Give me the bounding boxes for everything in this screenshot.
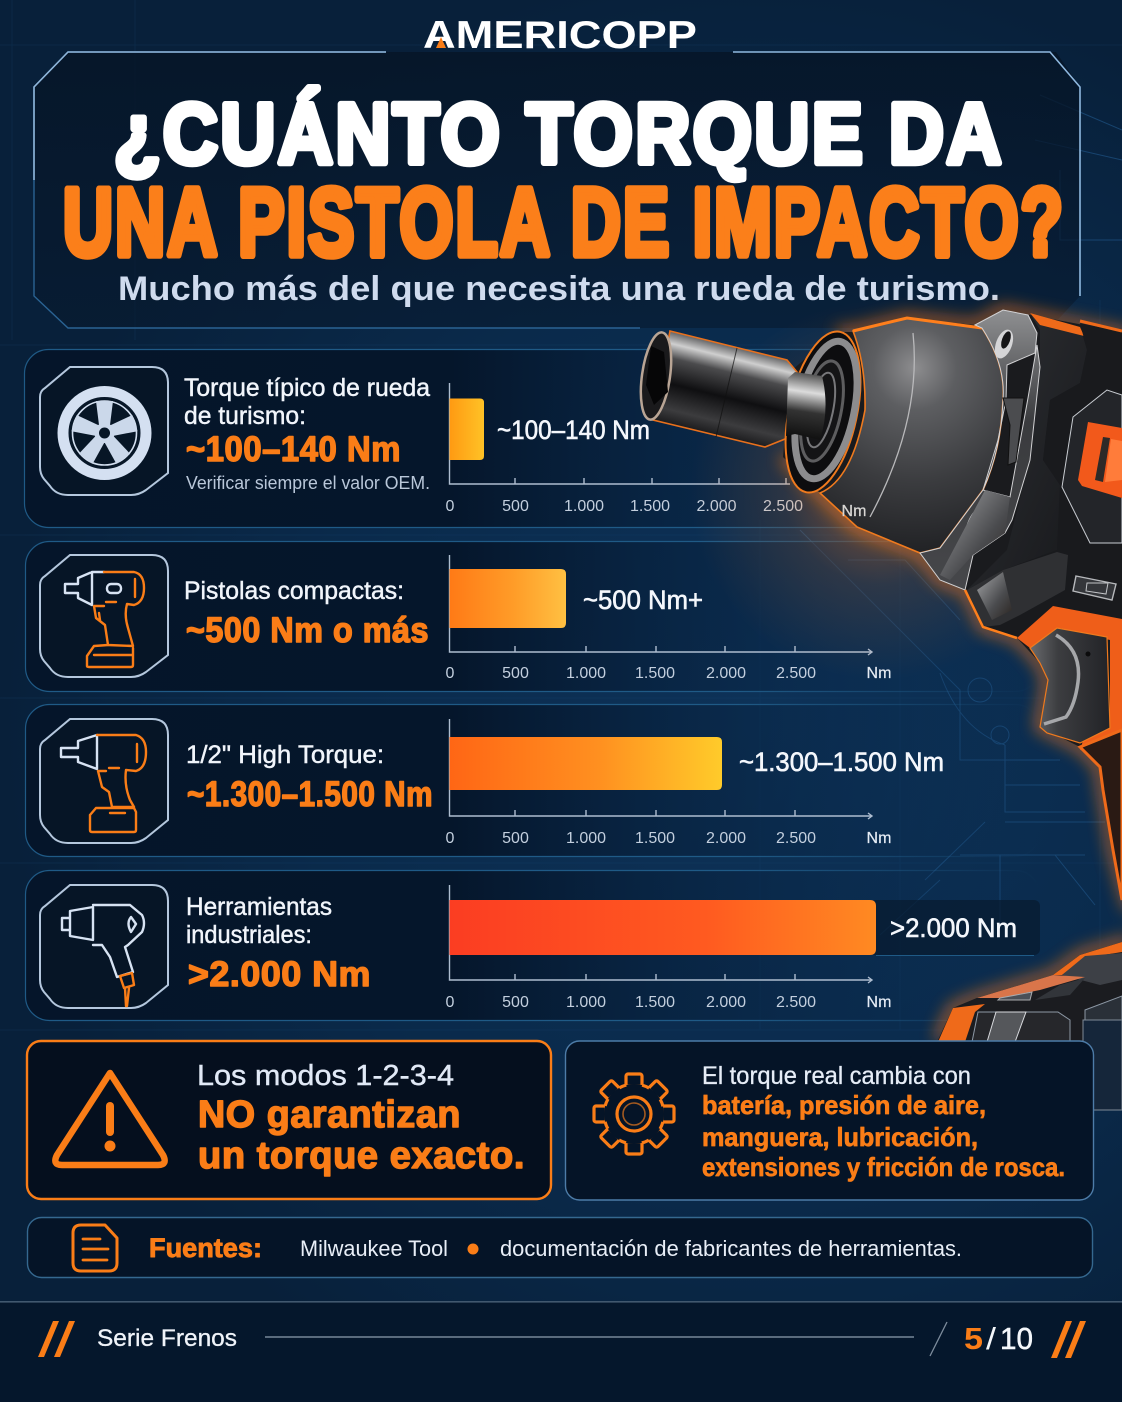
panel: row 1 wheel torque: ~100–140 Nm [186,430,401,469]
socket [653,331,797,447]
tool silhouette base [783,310,1122,1110]
panel: warning [27,1041,551,1199]
bar chart row 2: Nm [867,665,891,682]
bar chart row 3 [446,719,944,847]
panel: sources: Milwaukee Tool [300,1236,448,1261]
bar chart row 3: 1.500 [635,830,675,847]
blueprint lines [800,95,1122,935]
bar chart row 4 [446,885,1040,1011]
bar chart row 3: Nm [867,830,891,847]
icon: industrial gun [40,885,168,1008]
subtitle: Mucho más del que necesita una rueda de turismo. [118,270,1000,308]
panel: real torque factors [566,1041,1094,1200]
row 4 text: Herramientas [186,893,332,921]
icon: warning triangle [55,1073,165,1165]
icon: gear [594,1074,674,1154]
panel: real torque factors: manguera, lubricación, [702,1122,978,1152]
icon: left slashes [38,1321,75,1357]
panel: row 3 high torque [26,704,1040,856]
trigger guard [1017,606,1122,750]
flange [773,325,873,499]
textured grip block [967,552,1068,627]
title line 1: ¿CUÁNTO TORQUE DA [114,87,1004,182]
bar chart row 3: 2.500 [776,830,816,847]
bar chart row 2: 2.500 [776,665,816,682]
shaft [786,372,826,440]
bar chart row 3: 1.000 [566,830,606,847]
factors text: El torque real cambia con [702,1062,971,1090]
icon: compact impact gun [40,555,168,677]
panel: row 3 high torque: ~1.300–1.500 Nm [187,775,433,814]
bar chart row 1 [446,383,803,515]
logo: AMERICOPP [423,14,697,57]
panel: row 2 compact guns: ~500 Nm o más [186,611,429,650]
bar chart row 1: 2.500 [763,498,803,515]
bar chart row 2 [446,555,891,682]
gear plate [920,310,1040,590]
bar chart row 3: 2.000 [706,830,746,847]
bar chart row 4: 500 [502,994,529,1011]
panel: row 1 wheel torque [24,350,1040,528]
icon: high torque gun [40,719,168,843]
row 3 text: 1/2" High Torque: [186,741,384,769]
page number: 5 [964,1321,983,1356]
bar chart row 3: 0 [446,830,455,847]
panel: sources: documentación de fabricantes de herramientas. [500,1236,962,1261]
bar chart row 1: 0 [446,498,455,515]
icon: document [73,1225,117,1271]
footer [0,1301,1122,1402]
second body block [967,313,1087,590]
bar chart row 4: 2.500 [776,994,816,1011]
header frame [34,52,1080,328]
bar chart row 1: ~100–140 Nm [497,415,650,445]
panel: row 4 industrial tools: industriales: [186,921,312,949]
series label: Serie Frenos [97,1325,237,1352]
panel: row 1 wheel torque: Verificar siempre el valor OEM. [186,473,430,493]
motor housing [820,318,1003,553]
sources text: Fuentes: [149,1233,262,1263]
panel: warning: NO garantizan [198,1094,461,1136]
panel: real torque factors: extensiones y fricción de rosca. [702,1152,1065,1182]
bar chart row 2: 1.000 [566,665,606,682]
bar chart row 1: 2.000 [696,498,737,515]
bar chart row 2: 1.500 [635,665,675,682]
bar chart row 4: 2.000 [706,994,746,1011]
bar chart row 1: 500 [502,498,529,515]
panel: real torque factors: batería, presión de aire, [702,1090,986,1120]
footer: / [986,1321,996,1356]
row 2 text: Pistolas compactas: [184,577,404,605]
bar chart row 4: >2.000 Nm [890,913,1017,943]
trigger [1030,628,1110,743]
bar chart row 1: 1.000 [564,498,604,515]
bar chart row 2: ~500 Nm+ [583,585,703,615]
display [1078,422,1122,498]
bar chart row 1: 1.500 [630,498,670,515]
bar chart row 3: 500 [502,830,529,847]
icon: right slashes [1051,1321,1086,1358]
handle [1080,730,1122,900]
icon: wheel [40,367,168,495]
bar chart row 4: 1.500 [635,994,675,1011]
bar chart row 2: 2.000 [706,665,746,682]
panel: warning: un torque exacto. [198,1135,525,1177]
front body block [967,323,1122,638]
bar chart row 4: 0 [446,994,455,1011]
illustration: impact wrench [636,300,1122,1110]
bar chart row 3: ~1.300–1.500 Nm [739,747,944,777]
bar chart row 2: 500 [502,665,529,682]
battery base [938,942,1122,1110]
row 1 text: Torque típico de rueda [184,374,430,402]
footer: 10 [1000,1321,1033,1356]
bar chart row 2: 0 [446,665,455,682]
warning text: Los modos 1-2-3-4 [197,1060,454,1092]
panel: sources [28,1218,1092,1278]
panel: row 4 industrial tools [26,870,1040,1020]
panel: row 2 compact guns [26,542,1040,692]
bar chart row 4: Nm [867,994,891,1011]
mode button [1073,576,1116,600]
row 1 axis unit over tool: Nm [842,503,866,520]
panel: row 4 industrial tools: >2.000 Nm [188,955,371,994]
panel: row 1 wheel torque: de turismo: [184,402,306,430]
bar chart row 4: 1.000 [566,994,606,1011]
